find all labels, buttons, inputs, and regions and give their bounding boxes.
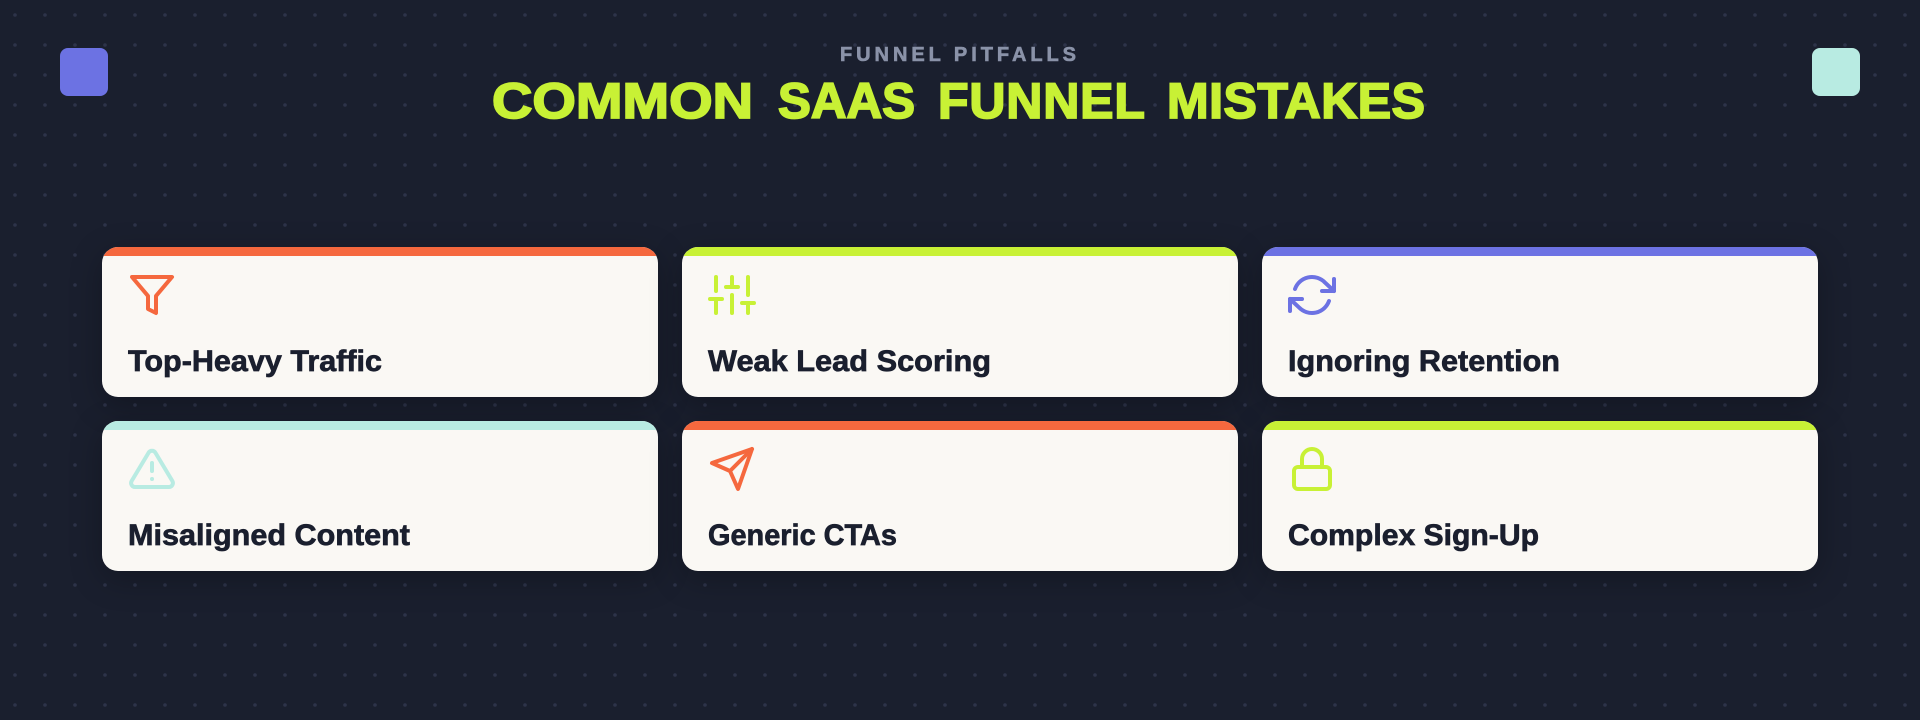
- title: COMMON: [492, 73, 753, 129]
- icon: padlock: [1292, 447, 1332, 491]
- icon: sliders: [708, 275, 756, 315]
- panel: Ignoring Retention: [1262, 247, 1818, 397]
- accent bar: [682, 247, 1238, 256]
- title: MISTAKES: [1167, 73, 1425, 129]
- header: [492, 44, 1425, 129]
- icon: warning triangle: [129, 448, 175, 489]
- accent bar: [102, 421, 658, 430]
- icon: paper plane: [710, 446, 754, 491]
- card heading: Misaligned Content: [128, 519, 410, 552]
- title: FUNNEL: [938, 73, 1144, 129]
- accent bar: [682, 421, 1238, 430]
- panel: Generic CTAs: [682, 421, 1238, 571]
- card heading: Complex Sign-Up: [1288, 519, 1539, 552]
- card heading: Weak Lead Scoring: [708, 345, 991, 378]
- panel: Complex Sign-Up: [1262, 421, 1818, 571]
- card heading: Ignoring Retention: [1288, 345, 1560, 378]
- panel: Weak Lead Scoring: [682, 247, 1238, 397]
- card heading: Top-Heavy Traffic: [128, 345, 382, 378]
- icon: refresh arrows: [1288, 275, 1336, 315]
- panel: Top-Heavy Traffic: [102, 247, 658, 397]
- decorative indigo square: [60, 48, 108, 96]
- icon: funnel: [130, 275, 174, 316]
- eyebrow: FUNNEL PITFALLS: [840, 44, 1076, 66]
- accent bar: [1262, 247, 1818, 256]
- title: SAAS: [778, 73, 915, 129]
- decorative mint square: [1812, 48, 1860, 96]
- card heading: Generic CTAs: [708, 519, 897, 552]
- accent bar: [102, 247, 658, 256]
- panel: Misaligned Content: [102, 421, 658, 571]
- accent bar: [1262, 421, 1818, 430]
